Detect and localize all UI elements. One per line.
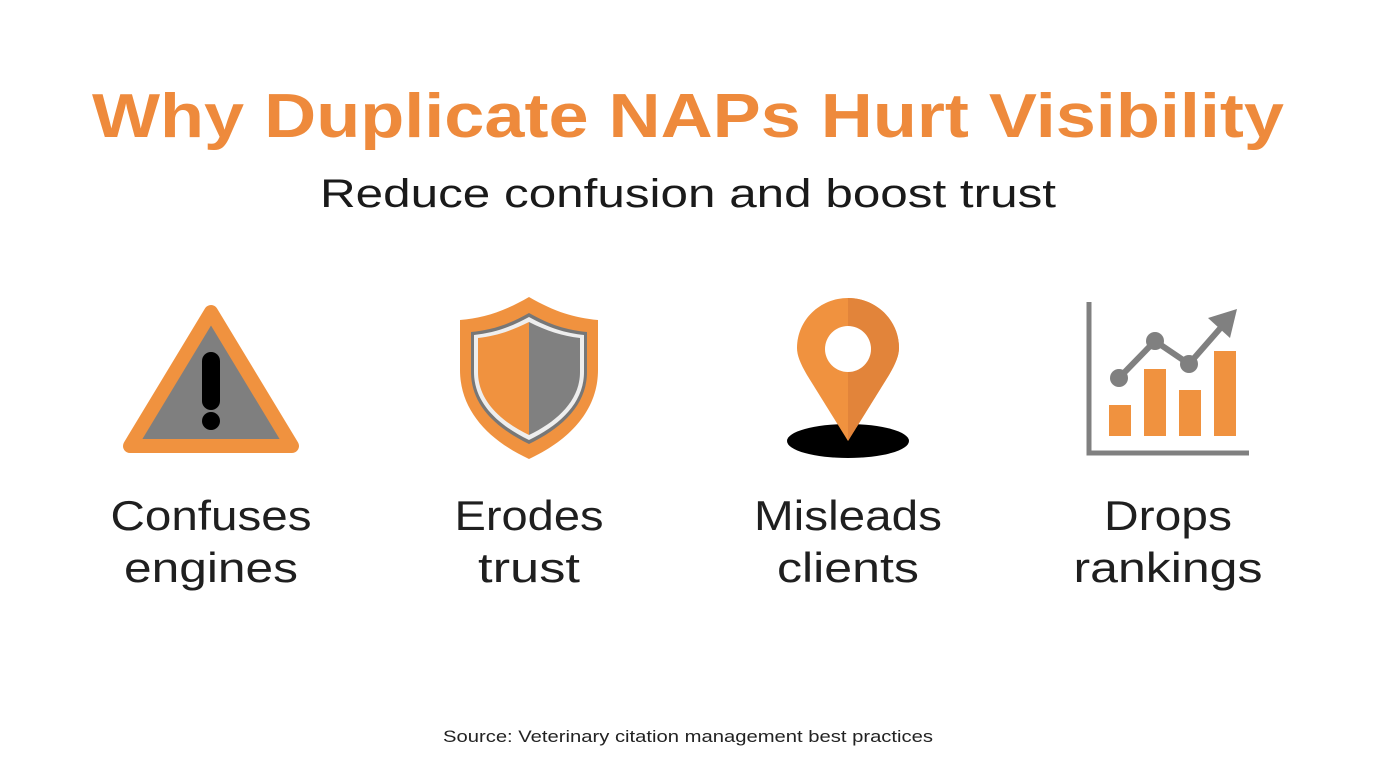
label: drops rankings: Drops [1104, 492, 1232, 539]
label: misleads clients [754, 492, 942, 591]
label: misleads clients: clients [777, 544, 919, 591]
label: confuses engines: Confuses [110, 492, 312, 539]
subtitle: Reduce confusion and boost trust [320, 172, 1056, 216]
source note: Source: Veterinary citation management best practices [443, 727, 933, 746]
icon: location pin [787, 298, 909, 458]
label: misleads clients: Misleads [754, 492, 942, 539]
label: drops rankings [1074, 492, 1262, 591]
title: Why Duplicate NAPs Hurt Visibility [92, 82, 1285, 151]
label: erodes trust: Erodes [454, 492, 604, 539]
label: erodes trust [454, 492, 604, 591]
label: confuses engines [110, 492, 312, 591]
label: confuses engines: engines [124, 544, 298, 591]
label: drops rankings: rankings [1074, 544, 1262, 591]
icon: warning triangle [130, 312, 292, 446]
icon: shield [460, 297, 598, 459]
label: erodes trust: trust [478, 544, 580, 591]
icon: rising chart [1089, 302, 1249, 453]
